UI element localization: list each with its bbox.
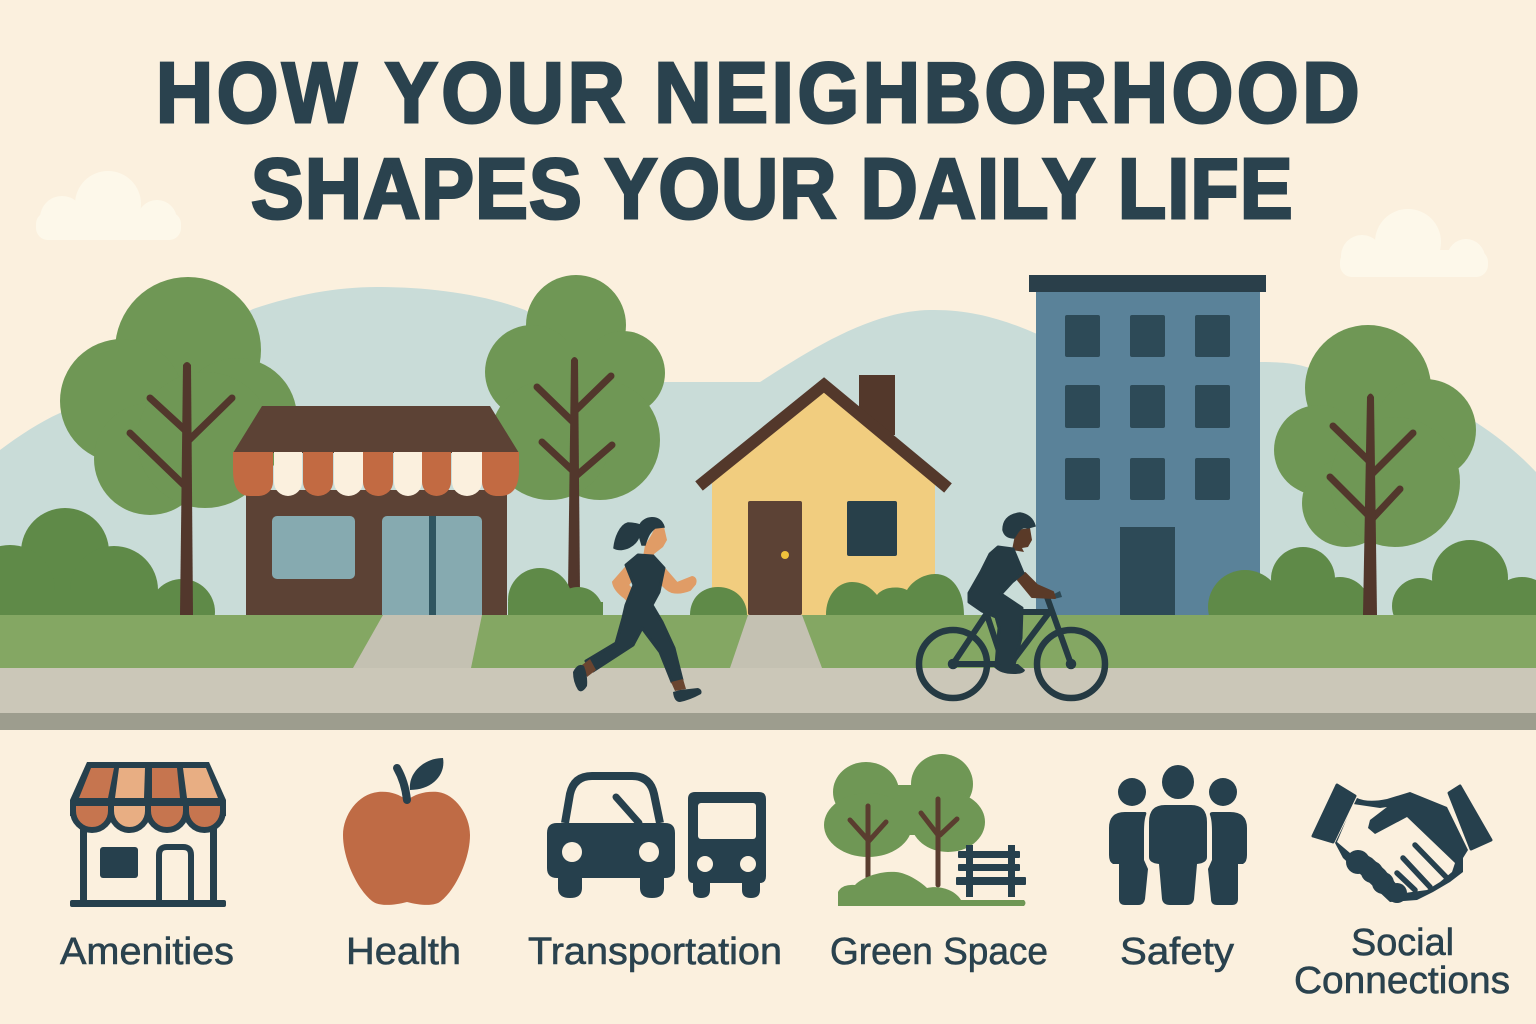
rider body (969, 547, 1023, 665)
tree 3 (1274, 325, 1476, 615)
icon: apple (343, 758, 470, 905)
icon trees foliage (824, 754, 985, 857)
rider hair (1003, 513, 1035, 538)
title: SHAPES YOUR DAILY LIFE (251, 142, 1293, 237)
title (156, 46, 1359, 237)
store window (272, 516, 355, 579)
bushes near store (508, 568, 603, 637)
tree 1 (60, 277, 297, 615)
icon: car (547, 776, 675, 898)
runner shoes (573, 665, 702, 702)
tree 2 (485, 275, 665, 592)
awning top (70, 762, 226, 816)
icon bench (956, 845, 1026, 897)
runner (573, 518, 702, 702)
ground: curb (0, 713, 1536, 730)
left cuff (1313, 785, 1355, 842)
rider arm (1018, 573, 1055, 598)
bushes right (1208, 540, 1536, 644)
house door (748, 501, 802, 615)
house walls (712, 390, 935, 615)
awning scallops (73, 803, 223, 830)
house (699, 375, 948, 615)
runner hair (614, 518, 664, 550)
runner torso and legs (586, 555, 682, 682)
shop door (159, 847, 191, 902)
store walkway (353, 615, 482, 668)
label: social connections: Social (1351, 922, 1454, 964)
background hills (0, 287, 1536, 620)
bicycle (919, 597, 1105, 698)
bushes left (0, 508, 215, 645)
title: HOW YOUR NEIGHBORHOOD (156, 46, 1359, 141)
hand highlights (1337, 804, 1455, 893)
rider shoe (994, 664, 1025, 674)
icon: safety people (1109, 765, 1247, 905)
ground: sidewalk (0, 668, 1536, 713)
runner socks (582, 659, 686, 691)
shop walls (84, 828, 214, 902)
shop base (70, 900, 226, 907)
store building (233, 406, 519, 615)
house roof (699, 385, 948, 488)
icon: handshake (1313, 785, 1491, 903)
cyclist (919, 513, 1105, 698)
rider head (1012, 528, 1032, 552)
right cuff (1449, 786, 1491, 849)
labels row (60, 922, 1510, 1002)
apartment building (1029, 275, 1266, 615)
fingers (1397, 845, 1447, 890)
label: safety: Safety (1120, 931, 1234, 973)
label: social connections: Connections (1294, 960, 1510, 1002)
cloud right (1340, 209, 1488, 277)
clasped hands (1335, 792, 1468, 902)
cloud left (36, 171, 181, 240)
ground: grass (0, 615, 1536, 668)
house bushes (690, 574, 964, 615)
runner head (643, 527, 667, 557)
label: green space: Green Space (830, 931, 1048, 973)
house window (847, 501, 897, 556)
label: health: Health (346, 931, 461, 973)
knuckle chain (1346, 850, 1407, 903)
store door (382, 516, 482, 615)
shop window (100, 847, 138, 878)
label: social connections (1294, 922, 1510, 1002)
store awning (233, 452, 519, 496)
runner back arm (613, 566, 639, 605)
store roof (233, 406, 519, 453)
house walkway (730, 615, 822, 668)
label: transportation: Transportation (528, 931, 782, 973)
icon bush and ground (838, 872, 1026, 906)
chimney (859, 375, 895, 435)
runner front arm (660, 568, 696, 593)
bicycle handle (1052, 591, 1062, 599)
icon: bus (688, 792, 766, 898)
label: amenities: Amenities (60, 931, 234, 973)
icon: amenities store (70, 762, 226, 907)
icon tree trunks (850, 799, 957, 885)
icon: green space (824, 754, 1026, 906)
